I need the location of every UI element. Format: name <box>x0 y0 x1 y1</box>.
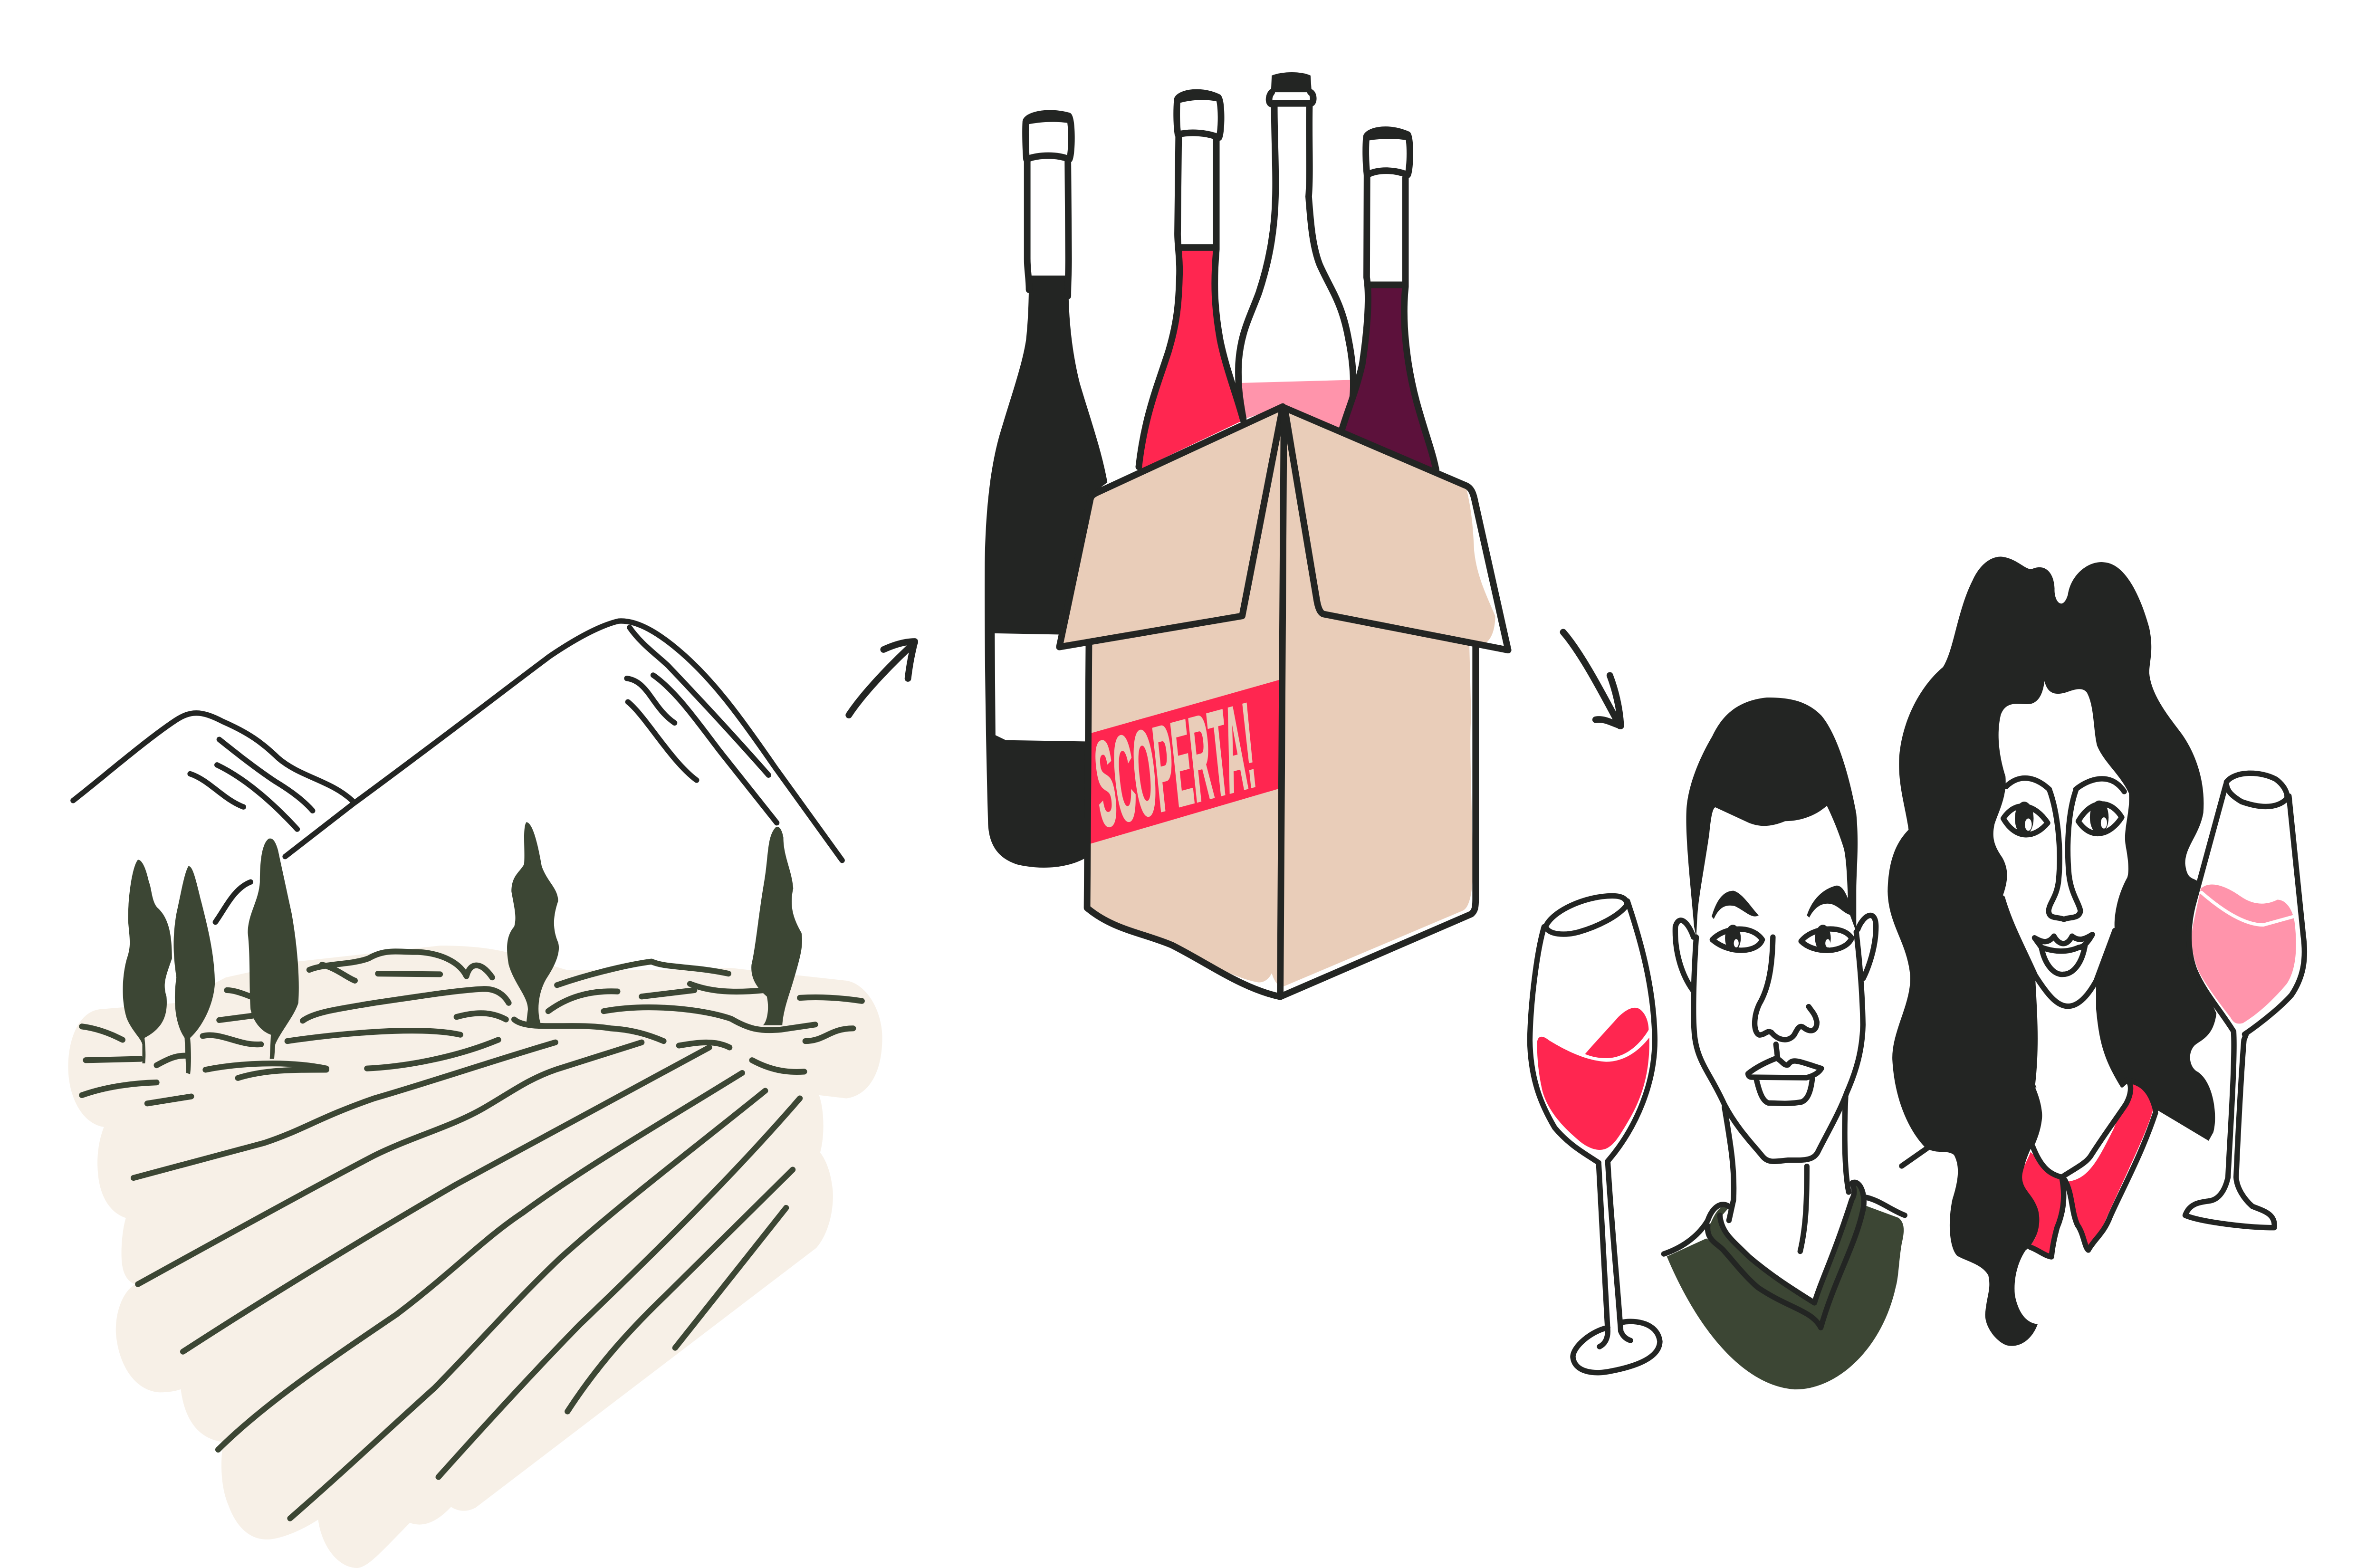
box band <box>1088 680 1279 844</box>
woman hair <box>1887 557 2216 1346</box>
cardboard box <box>1059 407 1508 997</box>
bottle: rose <box>1238 72 1353 430</box>
box outline <box>1059 407 1508 997</box>
panel: woman with glass <box>1887 557 2304 1346</box>
panel: vineyard landscape <box>68 621 882 1568</box>
woman collar <box>1902 1080 2156 1257</box>
man sweater <box>1664 1182 1905 1389</box>
panel: wine bottles in box <box>985 72 1508 997</box>
man head <box>1675 698 1876 1252</box>
wine glass: rose <box>2185 773 2304 1228</box>
bottle: black <box>985 111 1107 868</box>
cream field background <box>68 946 882 1568</box>
cypress trees <box>123 822 802 1074</box>
wine glass: red <box>1530 896 1660 1373</box>
bottle: dark purple <box>1342 129 1436 470</box>
text: SCOPERTA! <box>1090 678 1260 853</box>
panel: man with glass <box>1530 632 1905 1389</box>
hills <box>73 621 842 922</box>
field rows <box>82 952 862 1519</box>
woman face and neck <box>1993 681 2132 1177</box>
arrow: box to people <box>1563 632 1621 726</box>
arrow: landscape to box <box>849 641 915 715</box>
bottle: red <box>1139 90 1243 470</box>
